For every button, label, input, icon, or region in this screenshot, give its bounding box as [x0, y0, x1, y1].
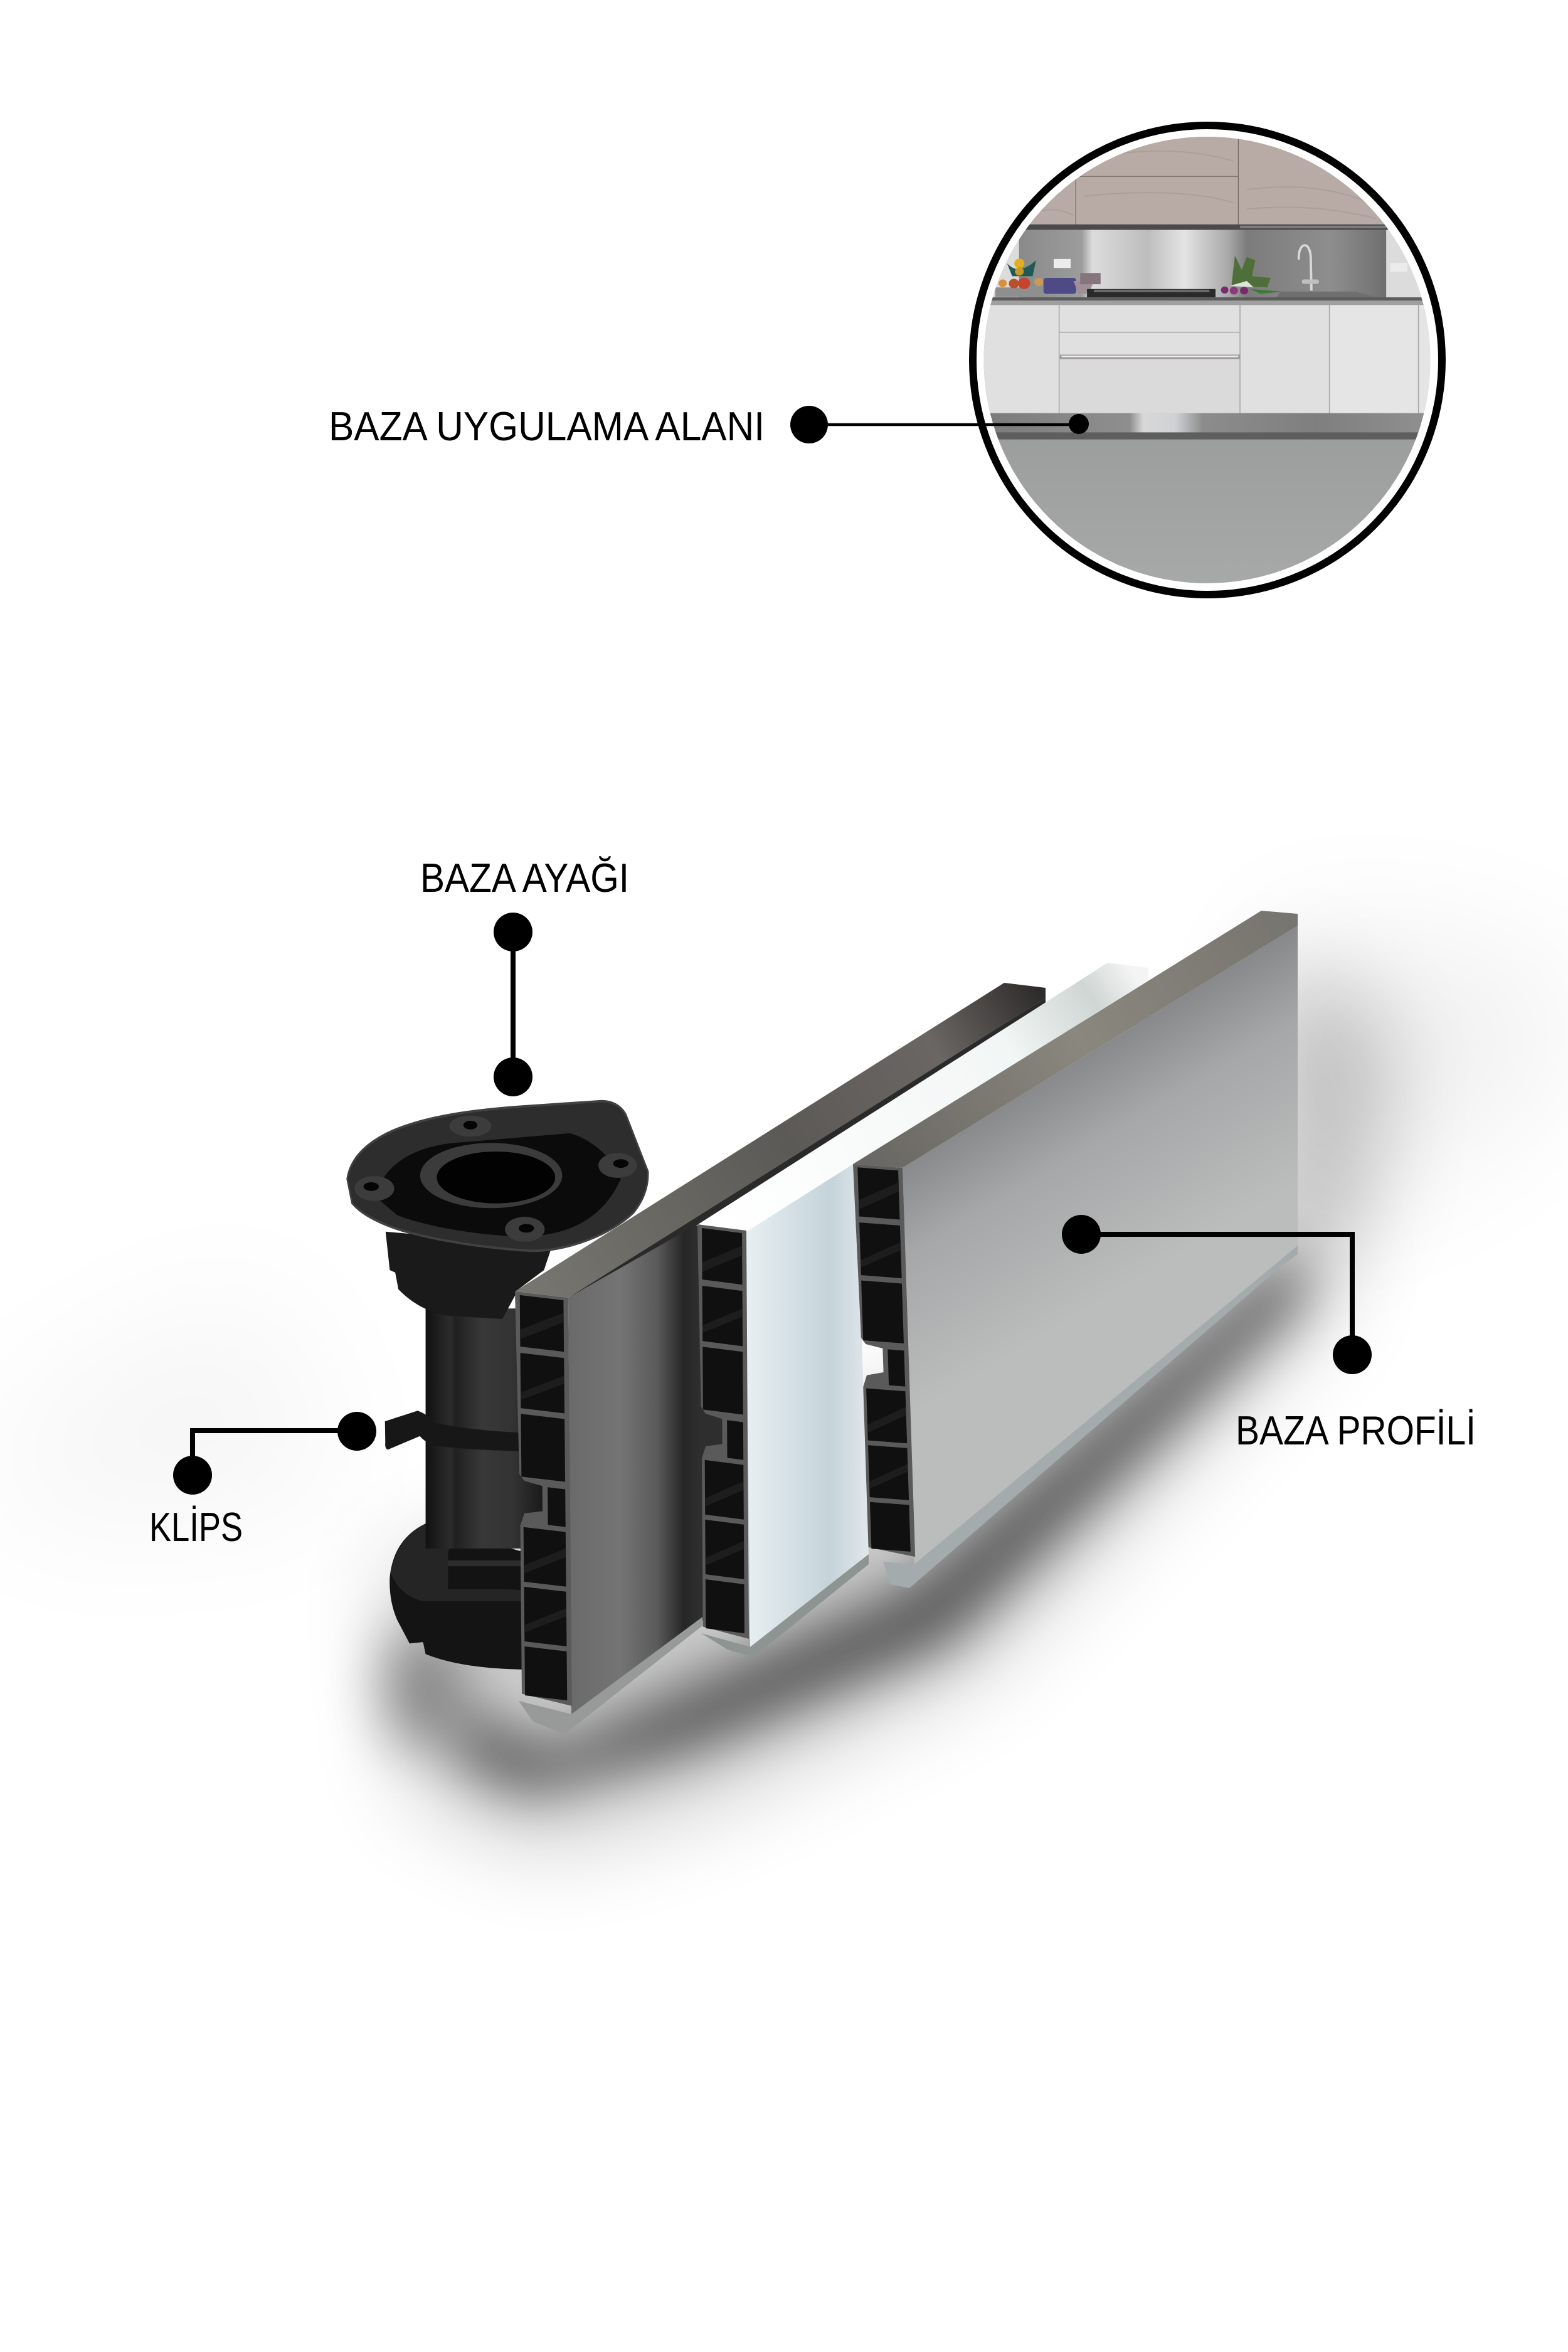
bottom lip	[883, 1246, 1298, 1588]
leader line	[511, 932, 516, 1077]
bottom lip	[701, 1554, 869, 1657]
screw bosses	[354, 1116, 637, 1242]
panel: kitchen application photo	[969, 122, 1446, 598]
face	[746, 1162, 869, 1647]
shadow: upper right faint	[1279, 928, 1568, 1192]
label: baza uygulama alani: BAZA UYGULAMA ALANI	[329, 403, 765, 449]
profile 2: glossy white	[696, 963, 1148, 1657]
face	[903, 926, 1298, 1564]
shadow: left faint	[0, 1279, 351, 1530]
leader line	[193, 1431, 357, 1475]
end cap	[697, 1224, 749, 1639]
marker dot: label	[1333, 1335, 1372, 1374]
marker dot: label	[173, 1456, 212, 1495]
kitchen photo	[983, 137, 1430, 583]
foot column	[426, 1308, 551, 1549]
clip strap	[385, 1411, 538, 1451]
leader line	[1081, 1234, 1352, 1355]
shadow: broad floor	[389, 1192, 1342, 1850]
bottom lip	[519, 1617, 702, 1734]
label: BAZA PROFİLİ	[1236, 1407, 1476, 1453]
marker dot: start	[790, 406, 828, 443]
marker dot: clip	[337, 1412, 376, 1451]
label: KLİPS	[149, 1504, 243, 1550]
marker dot: top	[494, 913, 532, 951]
callout: klips	[149, 1412, 376, 1550]
face	[568, 1207, 731, 1714]
product shadow	[0, 928, 1568, 1850]
callout: baza ayagi	[420, 855, 629, 1096]
label: BAZA AYAĞI	[420, 855, 629, 901]
end cap	[515, 1291, 572, 1706]
callout: baza profili	[1062, 1215, 1476, 1453]
marker dot: end	[1069, 414, 1089, 434]
gap shade	[568, 998, 1046, 1298]
profile 3: brushed silver	[853, 911, 1298, 1588]
leader line	[810, 423, 1079, 426]
tube hole	[437, 1152, 555, 1204]
foot base	[389, 1523, 544, 1670]
mounting plate	[347, 1101, 648, 1251]
callout: baza application area	[329, 403, 1089, 449]
product: baza foot	[347, 1101, 648, 1670]
shadow: beside foot	[383, 1624, 458, 1750]
black ring frame	[973, 125, 1442, 595]
profile 1: dark brushed	[515, 983, 1046, 1734]
shadow: right side glow	[1279, 953, 1380, 1254]
tube ring	[420, 1143, 562, 1208]
marker dot: bottom	[494, 1057, 532, 1096]
top edge	[515, 983, 1046, 1298]
top edge	[696, 963, 1148, 1232]
top edge	[853, 911, 1298, 1168]
end cap	[853, 1164, 915, 1557]
marker dot: profile	[1062, 1215, 1101, 1254]
shadow: contact	[452, 1254, 1308, 1794]
collar	[386, 1232, 552, 1319]
